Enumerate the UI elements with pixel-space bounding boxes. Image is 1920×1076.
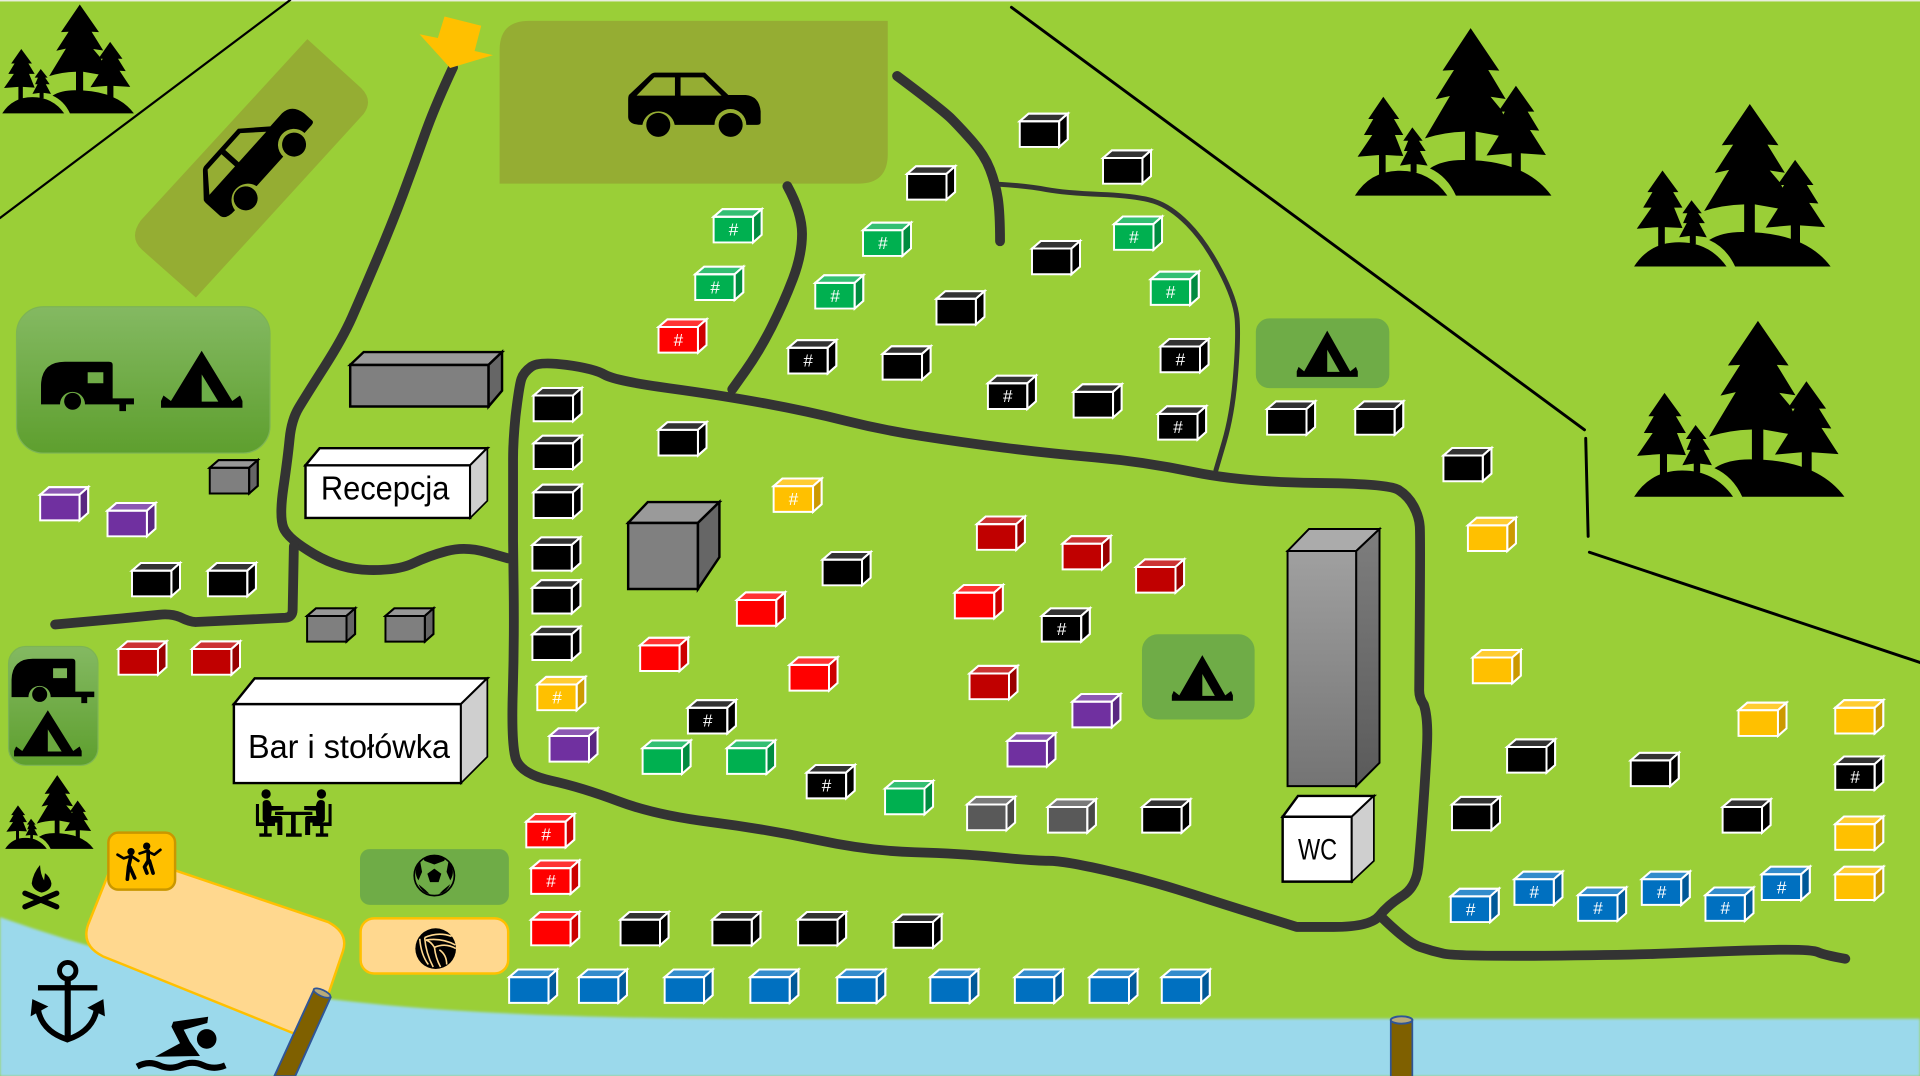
icon: tent central	[1172, 655, 1233, 701]
plots: bright red	[531, 585, 1003, 945]
label: Bar i stołówka: Bar i stołówka	[248, 729, 451, 766]
building: grey cube	[628, 502, 719, 589]
panel: small caravan and tent area	[9, 647, 98, 765]
forest: lower right	[1634, 321, 1844, 497]
icon: tent	[161, 351, 242, 408]
plot: green numbered: #	[1129, 227, 1139, 247]
plot: blue numbered	[1514, 872, 1562, 905]
icon: small caravan	[12, 659, 94, 703]
water	[0, 917, 1920, 1076]
plot: green numbered	[863, 223, 911, 256]
label: WC: WC	[1298, 834, 1337, 867]
plots: all cottages	[40, 114, 1883, 1003]
plot: black numbered: #	[803, 351, 813, 371]
label: Recepcja: Recepcja	[321, 471, 450, 508]
plots: black	[132, 114, 1771, 948]
icon: soccer ball	[414, 855, 454, 896]
plots: yellow	[1468, 518, 1883, 900]
plot: black numbered: #	[822, 776, 832, 796]
icon: small tent	[14, 710, 82, 756]
plot: black numbered: #	[1057, 619, 1067, 639]
plot: red numbered: #	[674, 330, 684, 350]
forest: left shore	[5, 775, 94, 849]
plot: blue numbered	[1451, 889, 1499, 922]
plot: green numbered: #	[710, 277, 720, 297]
plot: red numbered	[526, 814, 574, 847]
plot: blue numbered: #	[1777, 877, 1787, 897]
plots: dark grey	[967, 797, 1096, 833]
plot: blue numbered	[1762, 867, 1810, 900]
building: Bar i stołówka	[234, 678, 487, 783]
panel: beach	[86, 851, 344, 1033]
plot: blue numbered: #	[1721, 898, 1731, 918]
icon: dance floor	[108, 833, 175, 890]
building: grey long	[350, 352, 502, 407]
plot: red numbered	[659, 319, 707, 353]
plot: black numbered	[988, 376, 1036, 409]
panel: caravan and tent area	[17, 307, 270, 453]
forest: upper right	[1634, 104, 1831, 267]
plot: red numbered: #	[546, 871, 556, 891]
plot: blue numbered: #	[1530, 882, 1540, 902]
plots: blue shoreline	[509, 970, 1210, 1003]
plot: blue numbered: #	[1466, 899, 1476, 919]
panel: main parking	[500, 21, 888, 184]
icon: anchor	[31, 962, 105, 1042]
plot: blue numbered: #	[1657, 882, 1667, 902]
plot: yellow numbered	[774, 479, 822, 512]
plot: black numbered: #	[1850, 767, 1860, 787]
icon: caravan	[41, 362, 134, 411]
icon: people at table	[256, 789, 332, 837]
panel: tent field central	[1142, 634, 1255, 720]
building: tall grey	[1288, 529, 1380, 786]
plot: blue numbered: #	[1593, 898, 1603, 918]
plot: green numbered: #	[878, 233, 888, 253]
plot: green numbered	[1151, 272, 1199, 305]
plot: black numbered: #	[1173, 417, 1183, 437]
plot: black numbered: #	[703, 711, 713, 731]
plot: black numbered	[688, 700, 736, 733]
plot: black numbered	[807, 765, 855, 798]
plots: grey service huts	[210, 460, 433, 642]
entrance arrow	[420, 17, 493, 68]
plot: green numbered: #	[1166, 282, 1176, 302]
building: WC	[1283, 796, 1374, 882]
plot: green numbered: #	[830, 286, 840, 306]
icon: tent north	[1297, 331, 1358, 377]
top edge	[0, 0, 1920, 1]
boundary lines	[0, 0, 1920, 662]
icon: car on diagonal parking	[187, 87, 323, 229]
icon: soccer field	[360, 849, 509, 905]
plot: black numbered: #	[1176, 350, 1186, 370]
icon: pier on beach	[274, 986, 332, 1076]
plot: black numbered: #	[1003, 386, 1013, 406]
plot: black numbered	[1042, 608, 1090, 642]
plot: green numbered	[1114, 216, 1162, 250]
plot: blue numbered	[1705, 888, 1753, 921]
plot: blue numbered	[1642, 872, 1690, 905]
forest: top middle right	[1355, 28, 1551, 196]
panel: tent field north	[1256, 318, 1389, 388]
plot: black numbered	[1161, 339, 1209, 372]
plot: green numbered	[695, 267, 743, 300]
icon: volleyball	[415, 928, 456, 969]
forest: top left	[2, 4, 134, 113]
plot: green numbered	[714, 209, 762, 242]
plot: yellow numbered: #	[552, 687, 562, 707]
plots: purple	[40, 487, 1120, 767]
plots: green	[643, 741, 933, 814]
plot: black numbered	[1835, 756, 1883, 790]
plot: yellow numbered: #	[789, 489, 799, 509]
plot: green numbered	[815, 275, 863, 309]
roads	[55, 67, 1845, 959]
icon: car on main parking	[628, 73, 761, 137]
icon: swimmer	[137, 1017, 225, 1068]
panel: diagonal parking	[135, 39, 368, 298]
icon: pier on lake	[1391, 1016, 1412, 1076]
plot: red numbered	[531, 861, 579, 894]
icon: volleyball court	[361, 918, 508, 973]
plot: yellow numbered	[537, 677, 585, 710]
building: Recepcja	[306, 448, 487, 518]
plot: red numbered: #	[541, 825, 551, 845]
plot: blue numbered	[1578, 888, 1626, 921]
plots: dark red	[119, 516, 1184, 699]
plot: black numbered	[1158, 406, 1206, 440]
icon: campfire	[25, 865, 57, 907]
plot: black numbered	[788, 340, 836, 373]
plot: green numbered: #	[729, 220, 739, 240]
